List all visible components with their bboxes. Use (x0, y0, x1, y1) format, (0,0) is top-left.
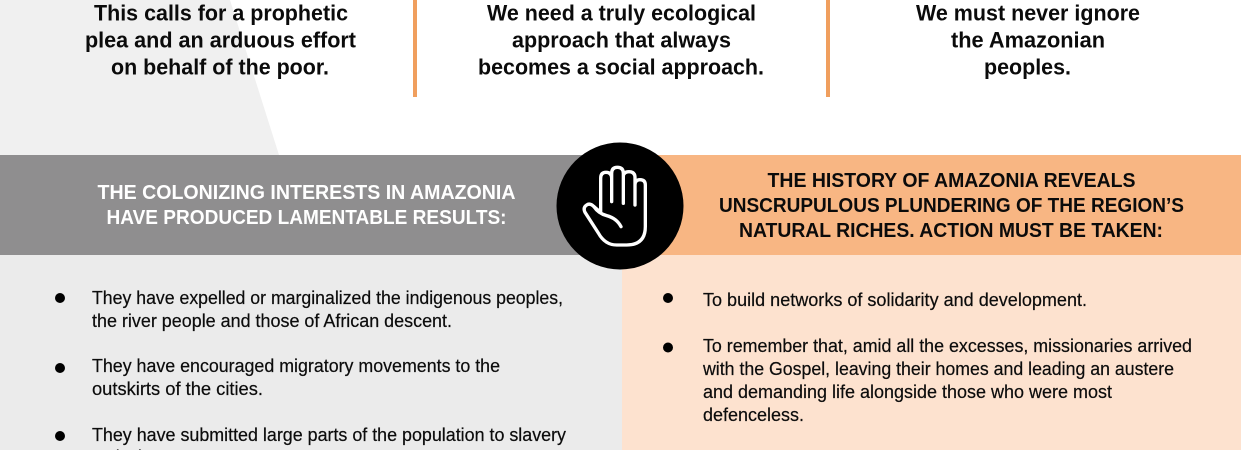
background grey wedge (0, 0, 279, 155)
panel body right (622, 255, 1241, 450)
text block: Amazonian peoples: the Amazonian (951, 28, 1105, 52)
text block: prophetic plea (85, 0, 357, 80)
panel: history of Amazonia (621, 155, 1241, 450)
heading left: HAVE PRODUCED LAMENTABLE RESULTS: (106, 207, 506, 229)
heading right (719, 170, 1184, 242)
bullet list right (663, 290, 1192, 425)
bullet list left (55, 288, 566, 450)
heading right: THE HISTORY OF AMAZONIA REVEALS (768, 170, 1136, 192)
divider left (413, 0, 417, 97)
bullet list left: They have expelled or marginalized the indigenous peoples, (92, 288, 563, 308)
panel: colonizing interests (0, 155, 622, 450)
icon: raised hand in black circle (556, 142, 684, 270)
text block: prophetic plea: This calls for a prophetic (94, 0, 348, 26)
bullet list right: with the Gospel, leaving their homes and leading an austere (702, 359, 1174, 379)
bullet list right: To remember that, amid all the excesses, missionaries arrived (703, 336, 1192, 356)
bullet list left: outskirts of the cities. (92, 379, 263, 399)
heading right: UNSCRUPULOUS PLUNDERING OF THE REGION’S (719, 195, 1184, 217)
divider right (826, 0, 830, 97)
text block: prophetic plea: plea and an arduous effort (85, 28, 357, 52)
text block: ecological approach (478, 0, 764, 80)
grey header band (0, 155, 621, 255)
heading left (98, 182, 516, 229)
text block: ecological approach: We need a truly ecological (487, 0, 756, 26)
text block: Amazonian peoples: We must never ignore (916, 0, 1140, 26)
panel body left (0, 255, 622, 450)
bullet list left: the river people and those of African descent. (92, 311, 452, 331)
bullet list left: They have encouraged migratory movements to the (92, 356, 500, 376)
heading right: NATURAL RICHES. ACTION MUST BE TAKEN: (739, 220, 1163, 242)
text block: Amazonian peoples: peoples. (984, 54, 1071, 80)
orange header band (621, 155, 1241, 255)
text block: ecological approach: approach that always (512, 28, 731, 52)
text block: Amazonian peoples (916, 0, 1140, 80)
bullet list right: and demanding life alongside those who were most (703, 382, 1112, 402)
bullet list right: defenceless. (703, 405, 804, 425)
bullet list right: To build networks of solidarity and development. (703, 290, 1087, 310)
bullet list left: They have submitted large parts of the population to slavery (92, 425, 566, 445)
text block: prophetic plea: on behalf of the poor. (111, 54, 329, 80)
heading left: THE COLONIZING INTERESTS IN AMAZONIA (98, 182, 516, 204)
text block: ecological approach: becomes a social approach. (478, 54, 764, 80)
